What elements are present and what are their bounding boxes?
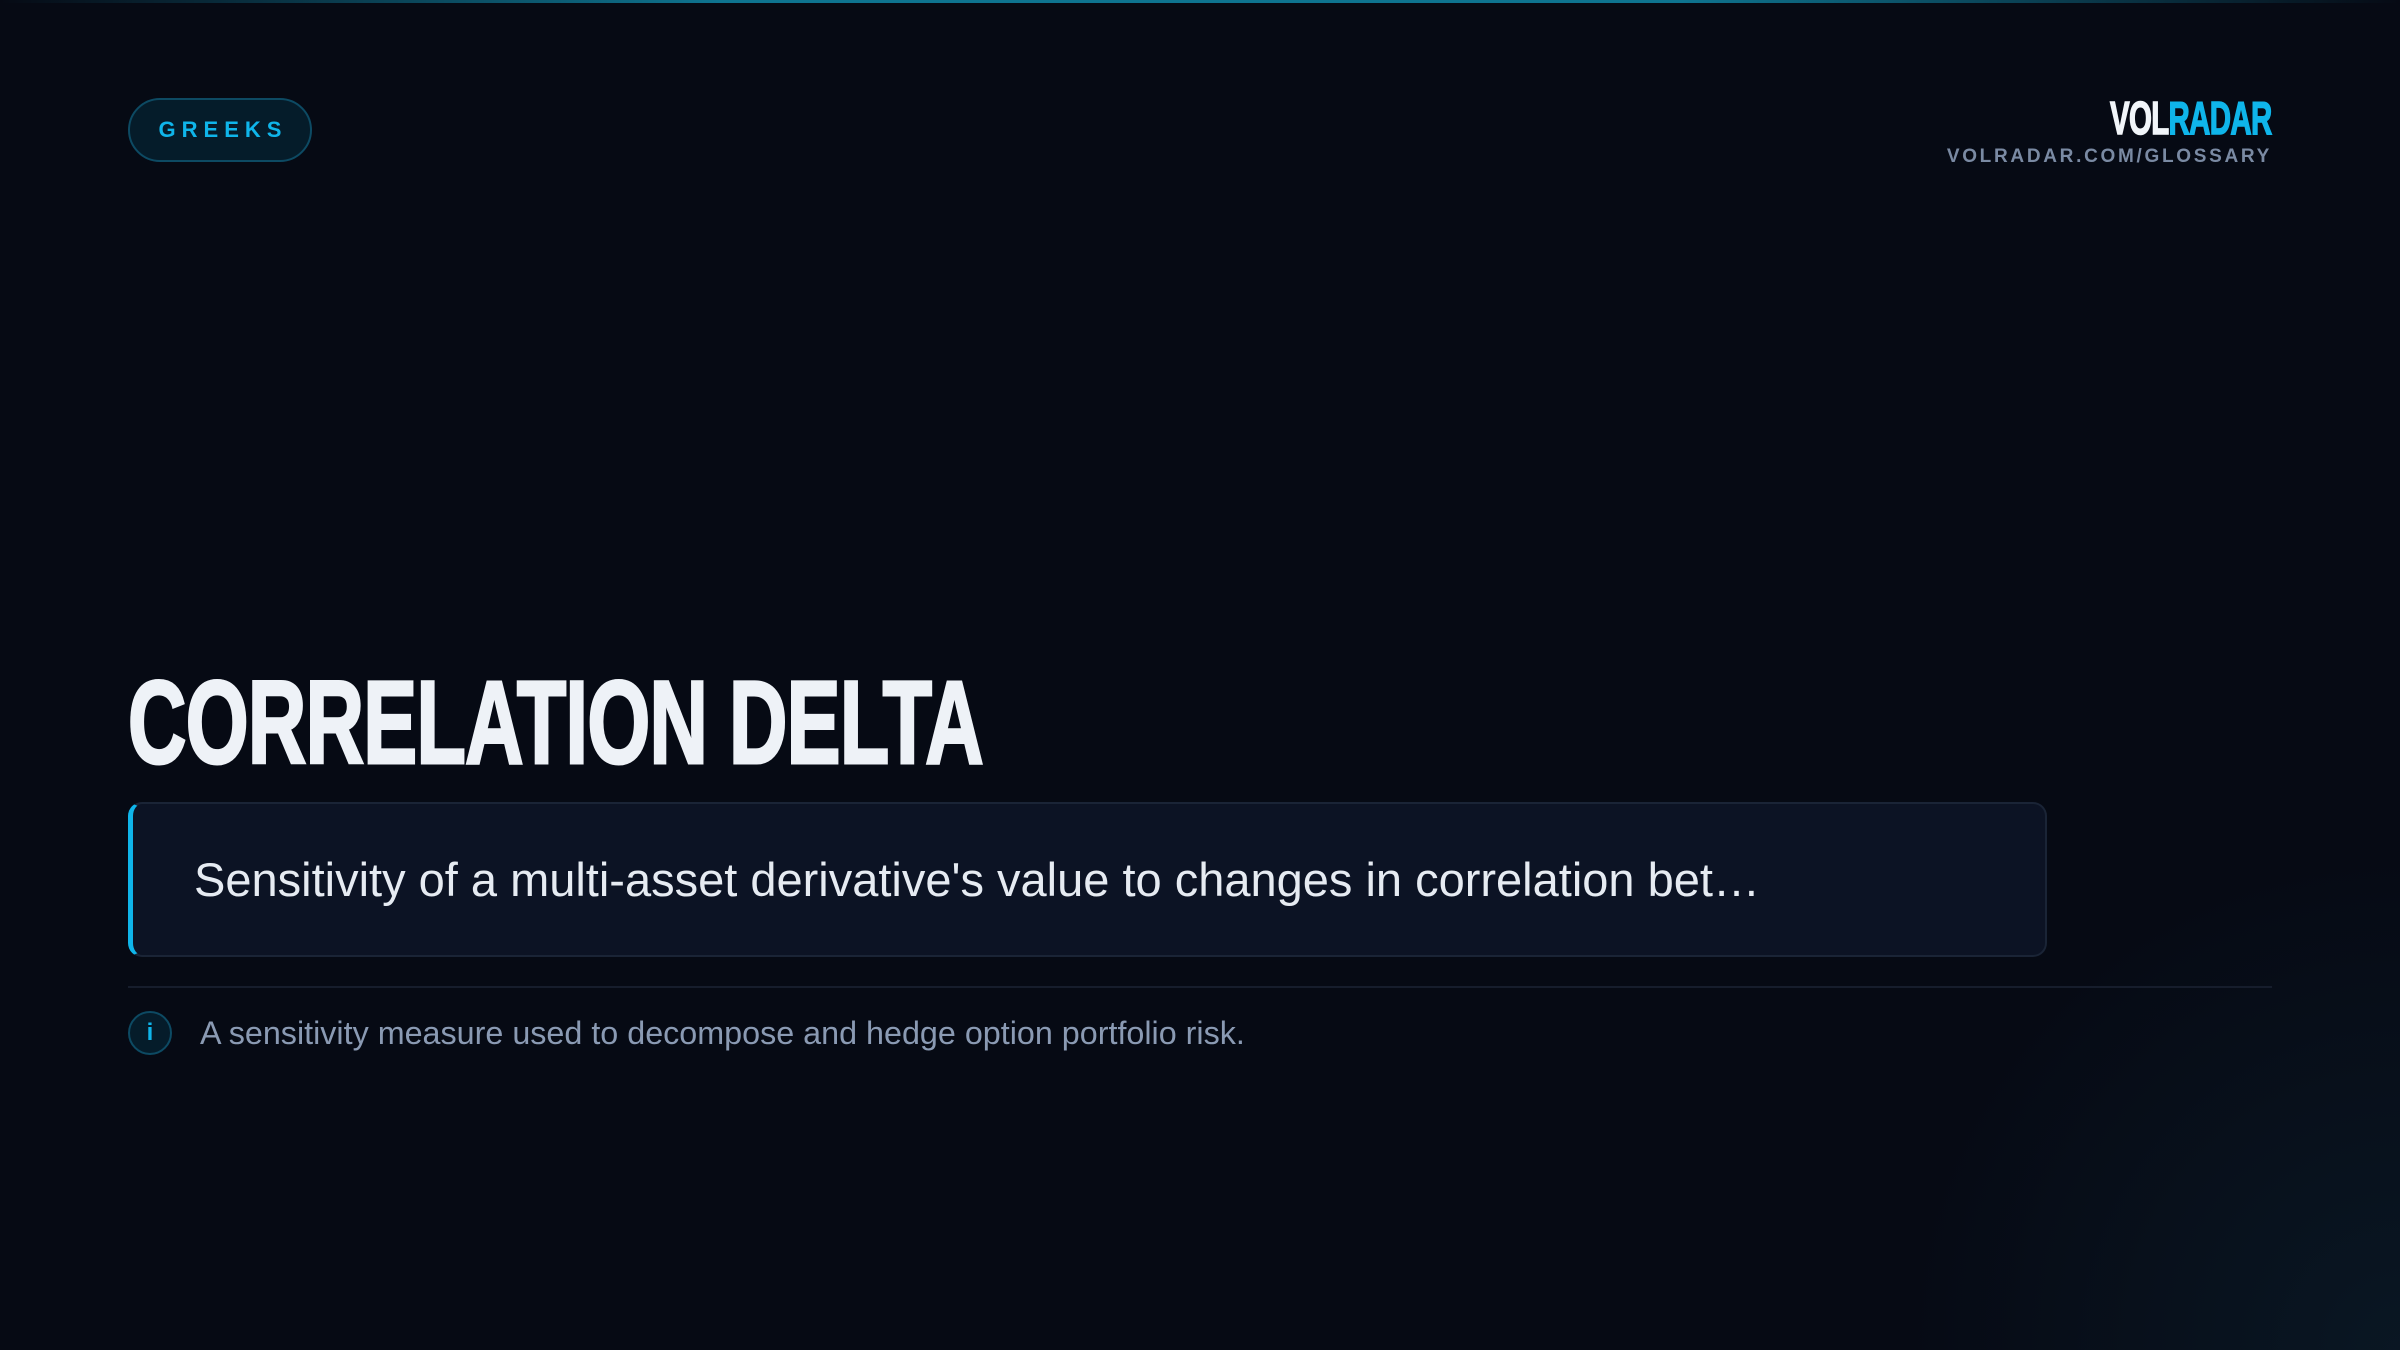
definition box: [128, 802, 2047, 957]
site url: VOLRADAR.COM/GLOSSARY: [1947, 146, 2272, 167]
category pill: [128, 98, 312, 162]
icon: info: i: [147, 1019, 153, 1046]
definition box: Sensitivity of a multi-asset derivative's value to changes in correlation bet…: [194, 853, 1760, 906]
logo: VOLRADAR: [2110, 92, 2272, 144]
info note: [128, 1011, 1245, 1055]
icon: info: [128, 1011, 172, 1055]
category pill: GREEKS: [159, 117, 287, 142]
title: CORRELATION DELTA: [128, 657, 983, 789]
note text: A sensitivity measure used to decompose and hedge option portfolio risk.: [200, 1015, 1245, 1051]
